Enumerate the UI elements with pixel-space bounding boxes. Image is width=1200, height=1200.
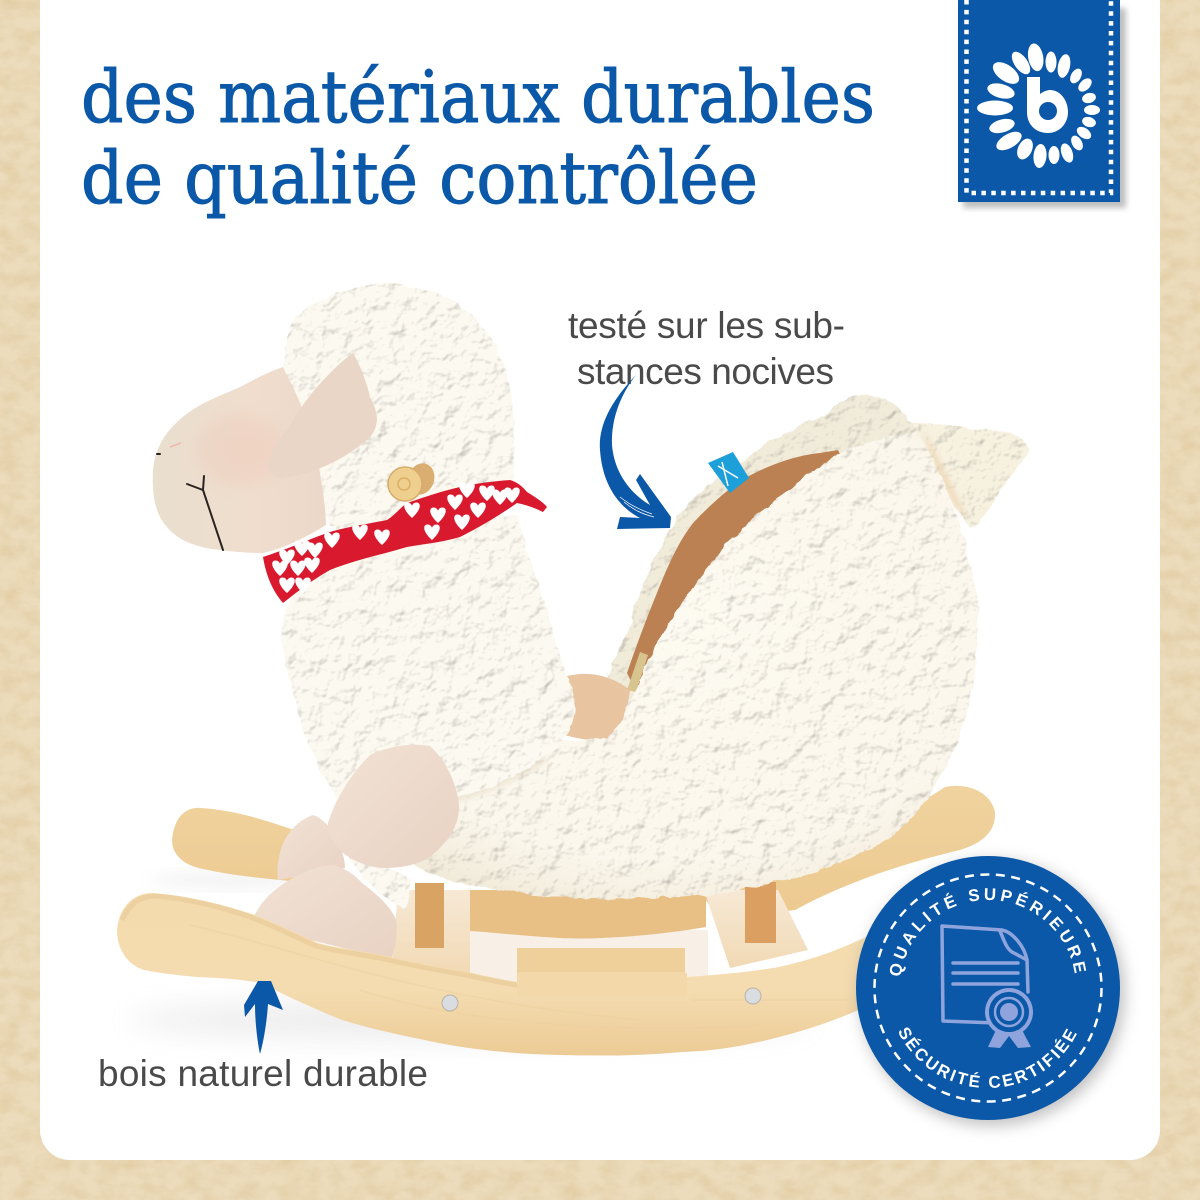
arrow: to wooden rocker	[244, 981, 283, 1054]
nose pink mark	[170, 443, 181, 447]
ear	[268, 353, 377, 478]
icon: rosette seal	[987, 990, 1031, 1048]
head wool	[283, 283, 514, 538]
title	[81, 55, 875, 220]
badge top text: QUALITÉ SUPÉRIEURE	[890, 888, 1086, 976]
floor shadow	[130, 872, 810, 1040]
wood grain	[190, 925, 850, 1028]
muzzle	[153, 367, 326, 553]
screw left	[442, 995, 458, 1011]
badge bottom text: SÉCURITÉ CERTIFIÉE	[899, 1028, 1077, 1088]
logo flower mark	[977, 42, 1100, 169]
right wooden upright	[704, 890, 808, 968]
neck shadow on body	[345, 758, 545, 809]
screw right	[745, 988, 761, 1004]
title: des matériaux durables	[81, 55, 875, 139]
muzzle blush	[195, 415, 285, 485]
rear foot	[277, 815, 345, 880]
callout: bois naturel durable: bois naturel durable	[98, 1053, 428, 1094]
front foot	[250, 865, 397, 960]
back rocker	[172, 786, 995, 920]
front rocker	[117, 893, 880, 1056]
wood post right	[745, 882, 776, 943]
gold seam tag	[627, 652, 648, 692]
blue care label	[708, 452, 749, 493]
back rim wool	[607, 395, 918, 720]
saddle seat	[550, 674, 630, 742]
logo tag	[958, 0, 1126, 208]
seat base	[470, 890, 706, 938]
body and back cushion	[340, 432, 978, 899]
callout: testé sur les substances nocives	[568, 305, 845, 392]
title: de qualité contrôlée	[81, 136, 758, 220]
brown seat lining	[627, 450, 850, 700]
callout: testé sur les substances nocives: testé sur les sub-	[568, 305, 845, 346]
scarf heart pattern	[272, 482, 520, 593]
rocker top edge band	[122, 896, 517, 985]
nose and mouth stitching	[157, 454, 223, 550]
front hoof	[328, 745, 459, 868]
wood post left	[415, 883, 444, 948]
left wooden upright	[392, 890, 470, 975]
chest tuft	[347, 855, 412, 912]
floor seen through the frame	[468, 930, 708, 985]
callout: testé sur les substances nocives: stances nocives	[577, 351, 834, 392]
tail joint shading	[922, 428, 968, 520]
wooden peg	[388, 460, 439, 501]
badge: quality seal	[852, 852, 1133, 1134]
rear tail wool	[905, 423, 1029, 527]
footrest	[517, 948, 687, 996]
neck and chest	[282, 515, 574, 807]
red scarf	[263, 480, 547, 603]
rocking sheep product photo	[117, 283, 1029, 1056]
arrow: to label	[600, 375, 671, 529]
icon: certificate	[942, 926, 1031, 1048]
